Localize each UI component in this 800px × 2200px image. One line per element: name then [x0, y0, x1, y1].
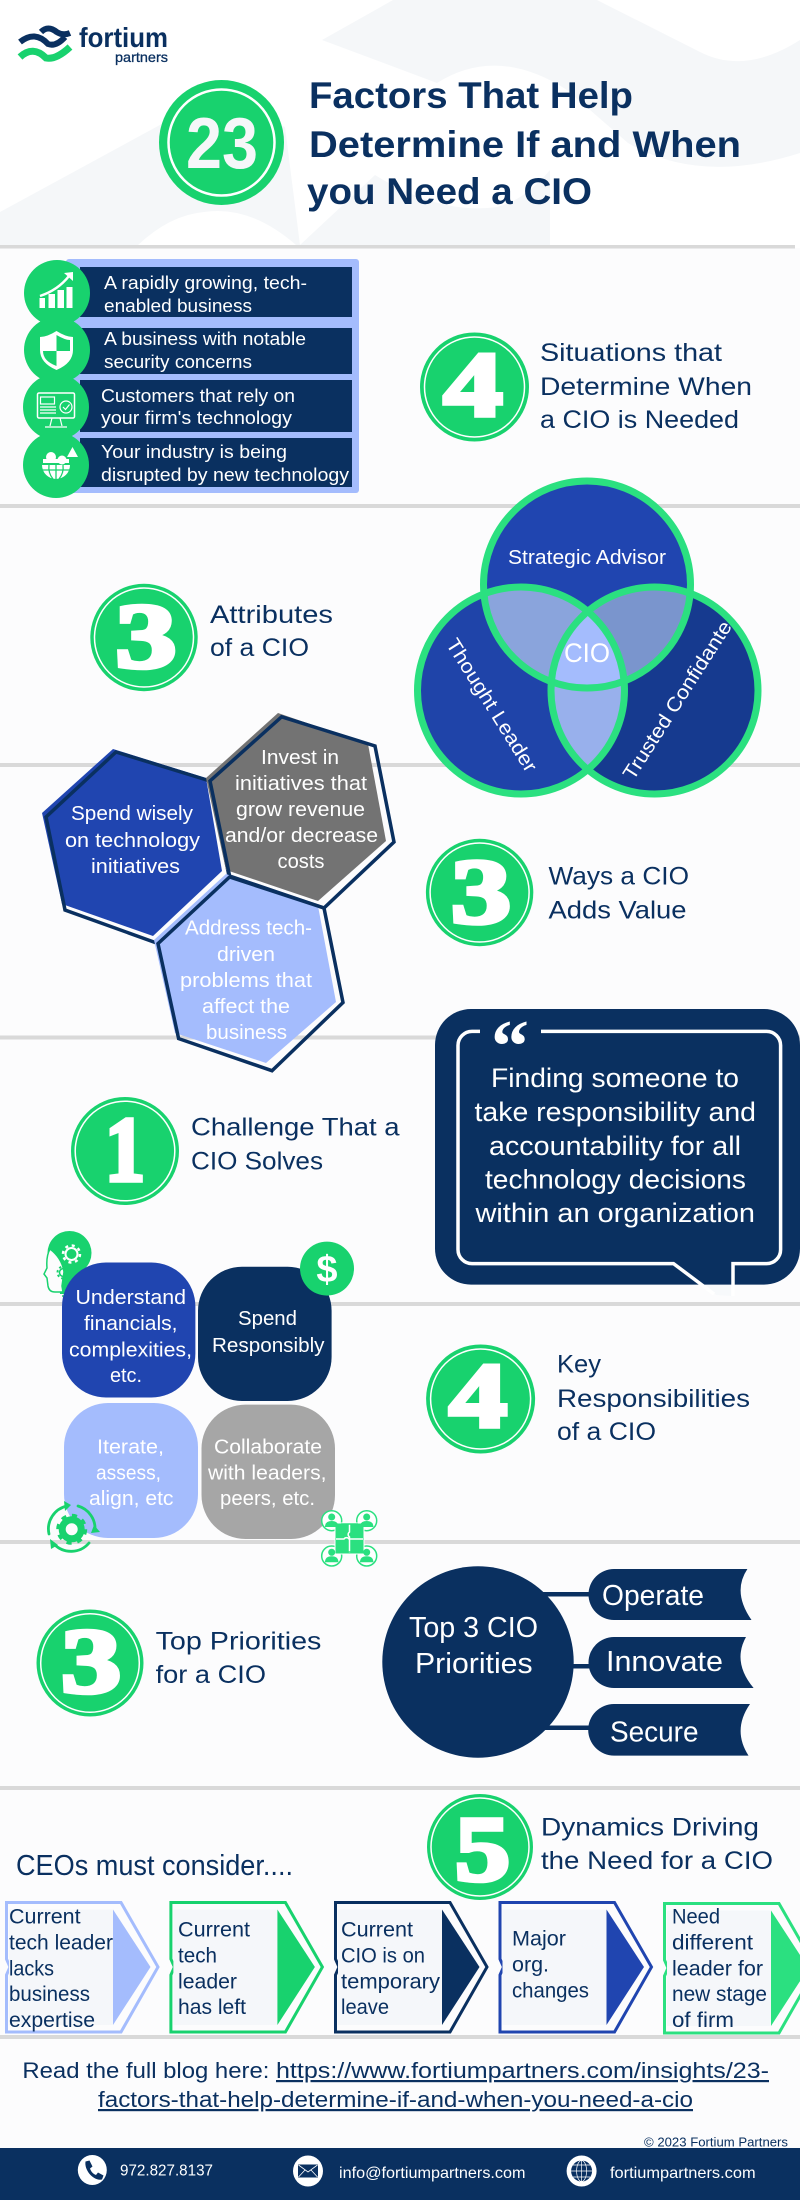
- badge: 1 challenge: [71, 1097, 179, 1205]
- badge: 1 challenge: 1: [105, 1098, 145, 1200]
- badge: 4 situations: [420, 332, 529, 442]
- text: collaborate: Collaborate: [214, 1437, 322, 1459]
- heading: dynamics: [541, 1814, 773, 1875]
- text: situation 4: [101, 442, 349, 485]
- heading: challenge: CIO Solves: [191, 1148, 323, 1176]
- chevron 5: Need: [672, 1906, 720, 1929]
- chevron 5: new stage: [672, 1983, 767, 2006]
- label: CIO: CIO: [564, 638, 610, 668]
- callout: quote: [435, 1006, 800, 1296]
- banner: operate: [588, 1569, 752, 1620]
- heading: dynamics: Dynamics Driving: [541, 1814, 759, 1842]
- text: situation 4: disrupted by new technology: [101, 465, 349, 485]
- text: collaborate: peers, etc.: [220, 1488, 315, 1510]
- banner: secure: Secure: [610, 1716, 698, 1748]
- chevron 5: leader for: [672, 1958, 763, 1981]
- text: situation 1: enabled business: [104, 296, 252, 316]
- badge: 4 situations: 4: [444, 334, 502, 436]
- hexagon: spend wisely: [42, 749, 229, 944]
- heading: priorities: [156, 1628, 321, 1689]
- card: understand financials: [62, 1262, 195, 1398]
- label: Thought Leader: Thought Leader: [441, 635, 541, 777]
- text: website: fortiumpartners.com: [610, 2165, 756, 2182]
- chevron 3: Current: [341, 1918, 413, 1941]
- hexagon: invest in initiatives: Invest in: [261, 747, 339, 769]
- chevron 2: leader: [178, 1970, 237, 1994]
- hexagon: invest in initiatives: costs: [278, 851, 324, 873]
- heading: attributes: Attributes: [210, 601, 333, 629]
- card: collaborate: [202, 1405, 335, 1539]
- chevron 4: changes: [512, 1980, 589, 2002]
- banner: innovate: Innovate: [606, 1646, 723, 1678]
- title: [307, 75, 741, 212]
- badge: 3 attributes: 3: [116, 585, 176, 687]
- card: iterate: [64, 1403, 198, 1538]
- heading: attributes: [210, 601, 333, 662]
- heading: situations: [540, 339, 752, 434]
- text: situation 2: A business with notable: [104, 329, 306, 349]
- heading: challenge: Challenge That a: [191, 1114, 400, 1142]
- text: copyright: © 2023 Fortium Partners: [644, 2134, 788, 2150]
- label: Strategic Advisor: Strategic Advisor: [508, 547, 666, 569]
- text: situation 1: [104, 273, 307, 316]
- text: understand financials: complexities,: [69, 1339, 192, 1361]
- heading: situations: Determine When: [540, 373, 752, 401]
- badge: 3 ways: 3: [451, 840, 511, 942]
- heading: dynamics: the Need for a CIO: [541, 1847, 773, 1875]
- logo: Fortium Partners: [20, 22, 168, 65]
- chevron 2: [171, 1902, 322, 2032]
- text: situation 2: security concerns: [104, 352, 252, 372]
- hexagon: spend wisely: initiatives: [91, 856, 180, 878]
- chevron 3: [336, 1902, 487, 2032]
- text: situation 1: A rapidly growing, tech-: [104, 273, 307, 293]
- text: iterate: [89, 1437, 174, 1510]
- chart: CIO attributes venn: [418, 481, 758, 794]
- heading: challenge: [191, 1114, 400, 1176]
- panel: four situations: [23, 259, 359, 498]
- hexagon: invest in initiatives: [206, 713, 394, 908]
- footer bar: [0, 2148, 800, 2200]
- chevron 1: tech leader: [9, 1932, 113, 1955]
- icon: mail: [293, 2156, 323, 2186]
- badge: 3 ways: [426, 839, 533, 946]
- heading: ways: [548, 863, 689, 925]
- heading: attributes: of a CIO: [210, 634, 309, 662]
- hexagon: invest in initiatives: and/or decrease: [225, 825, 378, 847]
- hexagon: address tech problems: driven: [217, 944, 275, 966]
- chevron 2: has left: [178, 1996, 246, 2019]
- text: spend responsibly: Responsibly: [212, 1335, 324, 1357]
- heading: responsibilities: Key: [557, 1350, 601, 1378]
- text: situation 2: [104, 329, 306, 372]
- hub circle: Priorities: [415, 1648, 533, 1680]
- chevron 1: Current: [9, 1906, 81, 1929]
- text: read the full blog: [22, 2058, 769, 2112]
- chevron 3: temporary: [341, 1970, 441, 1994]
- text: read the full blog: Read the full blog here:: [22, 2058, 269, 2083]
- badge: 23: 23: [186, 104, 258, 184]
- badge: 5 dynamics: 5: [455, 1798, 510, 1900]
- badge: 3 priorities: 3: [61, 1610, 121, 1712]
- chevron 3: CIO is on: [341, 1944, 425, 1968]
- chevron 4: org.: [512, 1954, 549, 1976]
- hexagon: spend wisely: on technology: [65, 830, 200, 852]
- badge: 23: [159, 80, 284, 205]
- icon: dollar: $: [316, 1249, 338, 1291]
- heading: priorities: for a CIO: [156, 1661, 266, 1689]
- icon: growth chart: [24, 260, 90, 326]
- text: understand financials: [69, 1287, 192, 1387]
- text: collaborate: with leaders,: [207, 1463, 326, 1485]
- text: situation 3: [101, 386, 295, 428]
- heading: responsibilities: [557, 1350, 750, 1446]
- hub circle: Top 3 CIO: [409, 1612, 538, 1644]
- hexagon: address tech problems: Address tech-: [185, 918, 312, 940]
- text: understand financials: etc.: [110, 1365, 142, 1387]
- text: understand financials: Understand: [76, 1287, 186, 1309]
- chevron 4: Major: [512, 1927, 566, 1950]
- icon: puzzle team: [322, 1511, 377, 1566]
- text: situation 3: your firm's technology: [101, 408, 292, 428]
- hub circle: [382, 1566, 574, 1758]
- chevron 5: of firm: [672, 2009, 734, 2032]
- heading: situations: Situations that: [540, 339, 722, 367]
- chevron 1: expertise: [9, 2009, 95, 2032]
- badge: 4 responsibilities: [426, 1344, 535, 1454]
- banner: secure: [588, 1704, 750, 1756]
- heading: CEOs must consider: CEOs must consider....: [16, 1850, 293, 1882]
- title: Factors That Help: [309, 75, 633, 116]
- icon: monitor: [23, 374, 89, 440]
- badge: 3 attributes: [90, 584, 198, 691]
- text: spend responsibly: [212, 1308, 324, 1357]
- chevron 1: business: [9, 1983, 90, 2006]
- chevron 5: different: [672, 1932, 753, 1955]
- text: quote: within an organization: [474, 1198, 755, 1228]
- chevron 2: tech: [178, 1944, 217, 1968]
- card: spend responsibly: [198, 1267, 332, 1401]
- heading: priorities: Top Priorities: [156, 1628, 321, 1656]
- text: situation 3: Customers that rely on: [101, 386, 295, 406]
- diagram: top 3 CIO priorities: [382, 1566, 754, 1758]
- icon: quotation mark: “: [491, 1006, 529, 1088]
- icon: disrupted globe: [23, 432, 89, 498]
- text: quote: technology decisions: [485, 1165, 746, 1195]
- hexagon: invest in initiatives: grow revenue: [236, 799, 365, 821]
- banner: operate: Operate: [602, 1580, 704, 1612]
- hexagon: address tech problems: [154, 874, 343, 1071]
- chevron 1: [6, 1902, 158, 2032]
- icon: dollar: [300, 1242, 354, 1296]
- text: collaborate: [207, 1437, 326, 1510]
- label: Trusted Confidante: Trusted Confidante: [619, 617, 737, 784]
- text: read the full blog: https://www.fortiumpartners.com/insights/23-: [276, 2058, 769, 2083]
- heading: ways: Ways a CIO: [548, 863, 689, 891]
- chevron 3: leave: [341, 1996, 389, 2019]
- text: email: info@fortiumpartners.com: [339, 2165, 526, 2182]
- text: quote: [474, 1063, 756, 1228]
- chevron 4: [500, 1902, 652, 2032]
- hexagon: invest in initiatives: initiatives that: [235, 773, 367, 795]
- heading: situations: a CIO is Needed: [540, 406, 739, 434]
- text: spend responsibly: Spend: [238, 1308, 297, 1330]
- hexagon: address tech problems: affect the: [202, 996, 290, 1018]
- text: iterate: assess,: [96, 1463, 161, 1485]
- banner: innovate: [588, 1637, 754, 1688]
- title: Determine If and When: [309, 124, 741, 165]
- text: phone: 972.827.8137: [120, 2163, 213, 2180]
- icon: globe: [567, 2156, 597, 2186]
- text: quote: Finding someone to: [491, 1063, 739, 1093]
- hexagon: address tech problems: problems that: [180, 970, 312, 992]
- text: situation 4: Your industry is being: [101, 442, 287, 462]
- logo: Fortium Partners: partners: [115, 49, 168, 65]
- heading: responsibilities: Responsibilities: [557, 1385, 750, 1413]
- chevron 2: Current: [178, 1918, 250, 1941]
- chevron 1: lacks: [9, 1958, 54, 1981]
- badge: 4 responsibilities: 4: [449, 1344, 507, 1446]
- text: read the full blog: factors-that-help-determine-if-and-when-you-need-a-cio: [98, 2087, 693, 2112]
- text: quote: accountability for all: [489, 1131, 741, 1161]
- text: iterate: align, etc: [89, 1488, 174, 1510]
- hexagon: address tech problems: business: [206, 1022, 287, 1044]
- badge: 5 dynamics: [427, 1794, 533, 1900]
- chevron 5: [664, 1904, 800, 2033]
- heading: ways: Adds Value: [548, 897, 686, 925]
- logo: Fortium Partners: fortium: [79, 22, 168, 53]
- text: understand financials: financials,: [84, 1313, 178, 1335]
- badge: 3 priorities: [36, 1610, 144, 1716]
- text: quote: take responsibility and: [474, 1097, 756, 1127]
- icon: phone: [78, 2155, 107, 2185]
- icon: head with gears: [44, 1231, 92, 1296]
- title: you Need a CIO: [307, 171, 592, 212]
- icon: shield: [24, 317, 90, 383]
- text: iterate: Iterate,: [97, 1437, 164, 1459]
- hexagon: spend wisely: Spend wisely: [71, 803, 193, 825]
- heading: responsibilities: of a CIO: [557, 1418, 656, 1446]
- icon: gear cycle: [48, 1501, 100, 1551]
